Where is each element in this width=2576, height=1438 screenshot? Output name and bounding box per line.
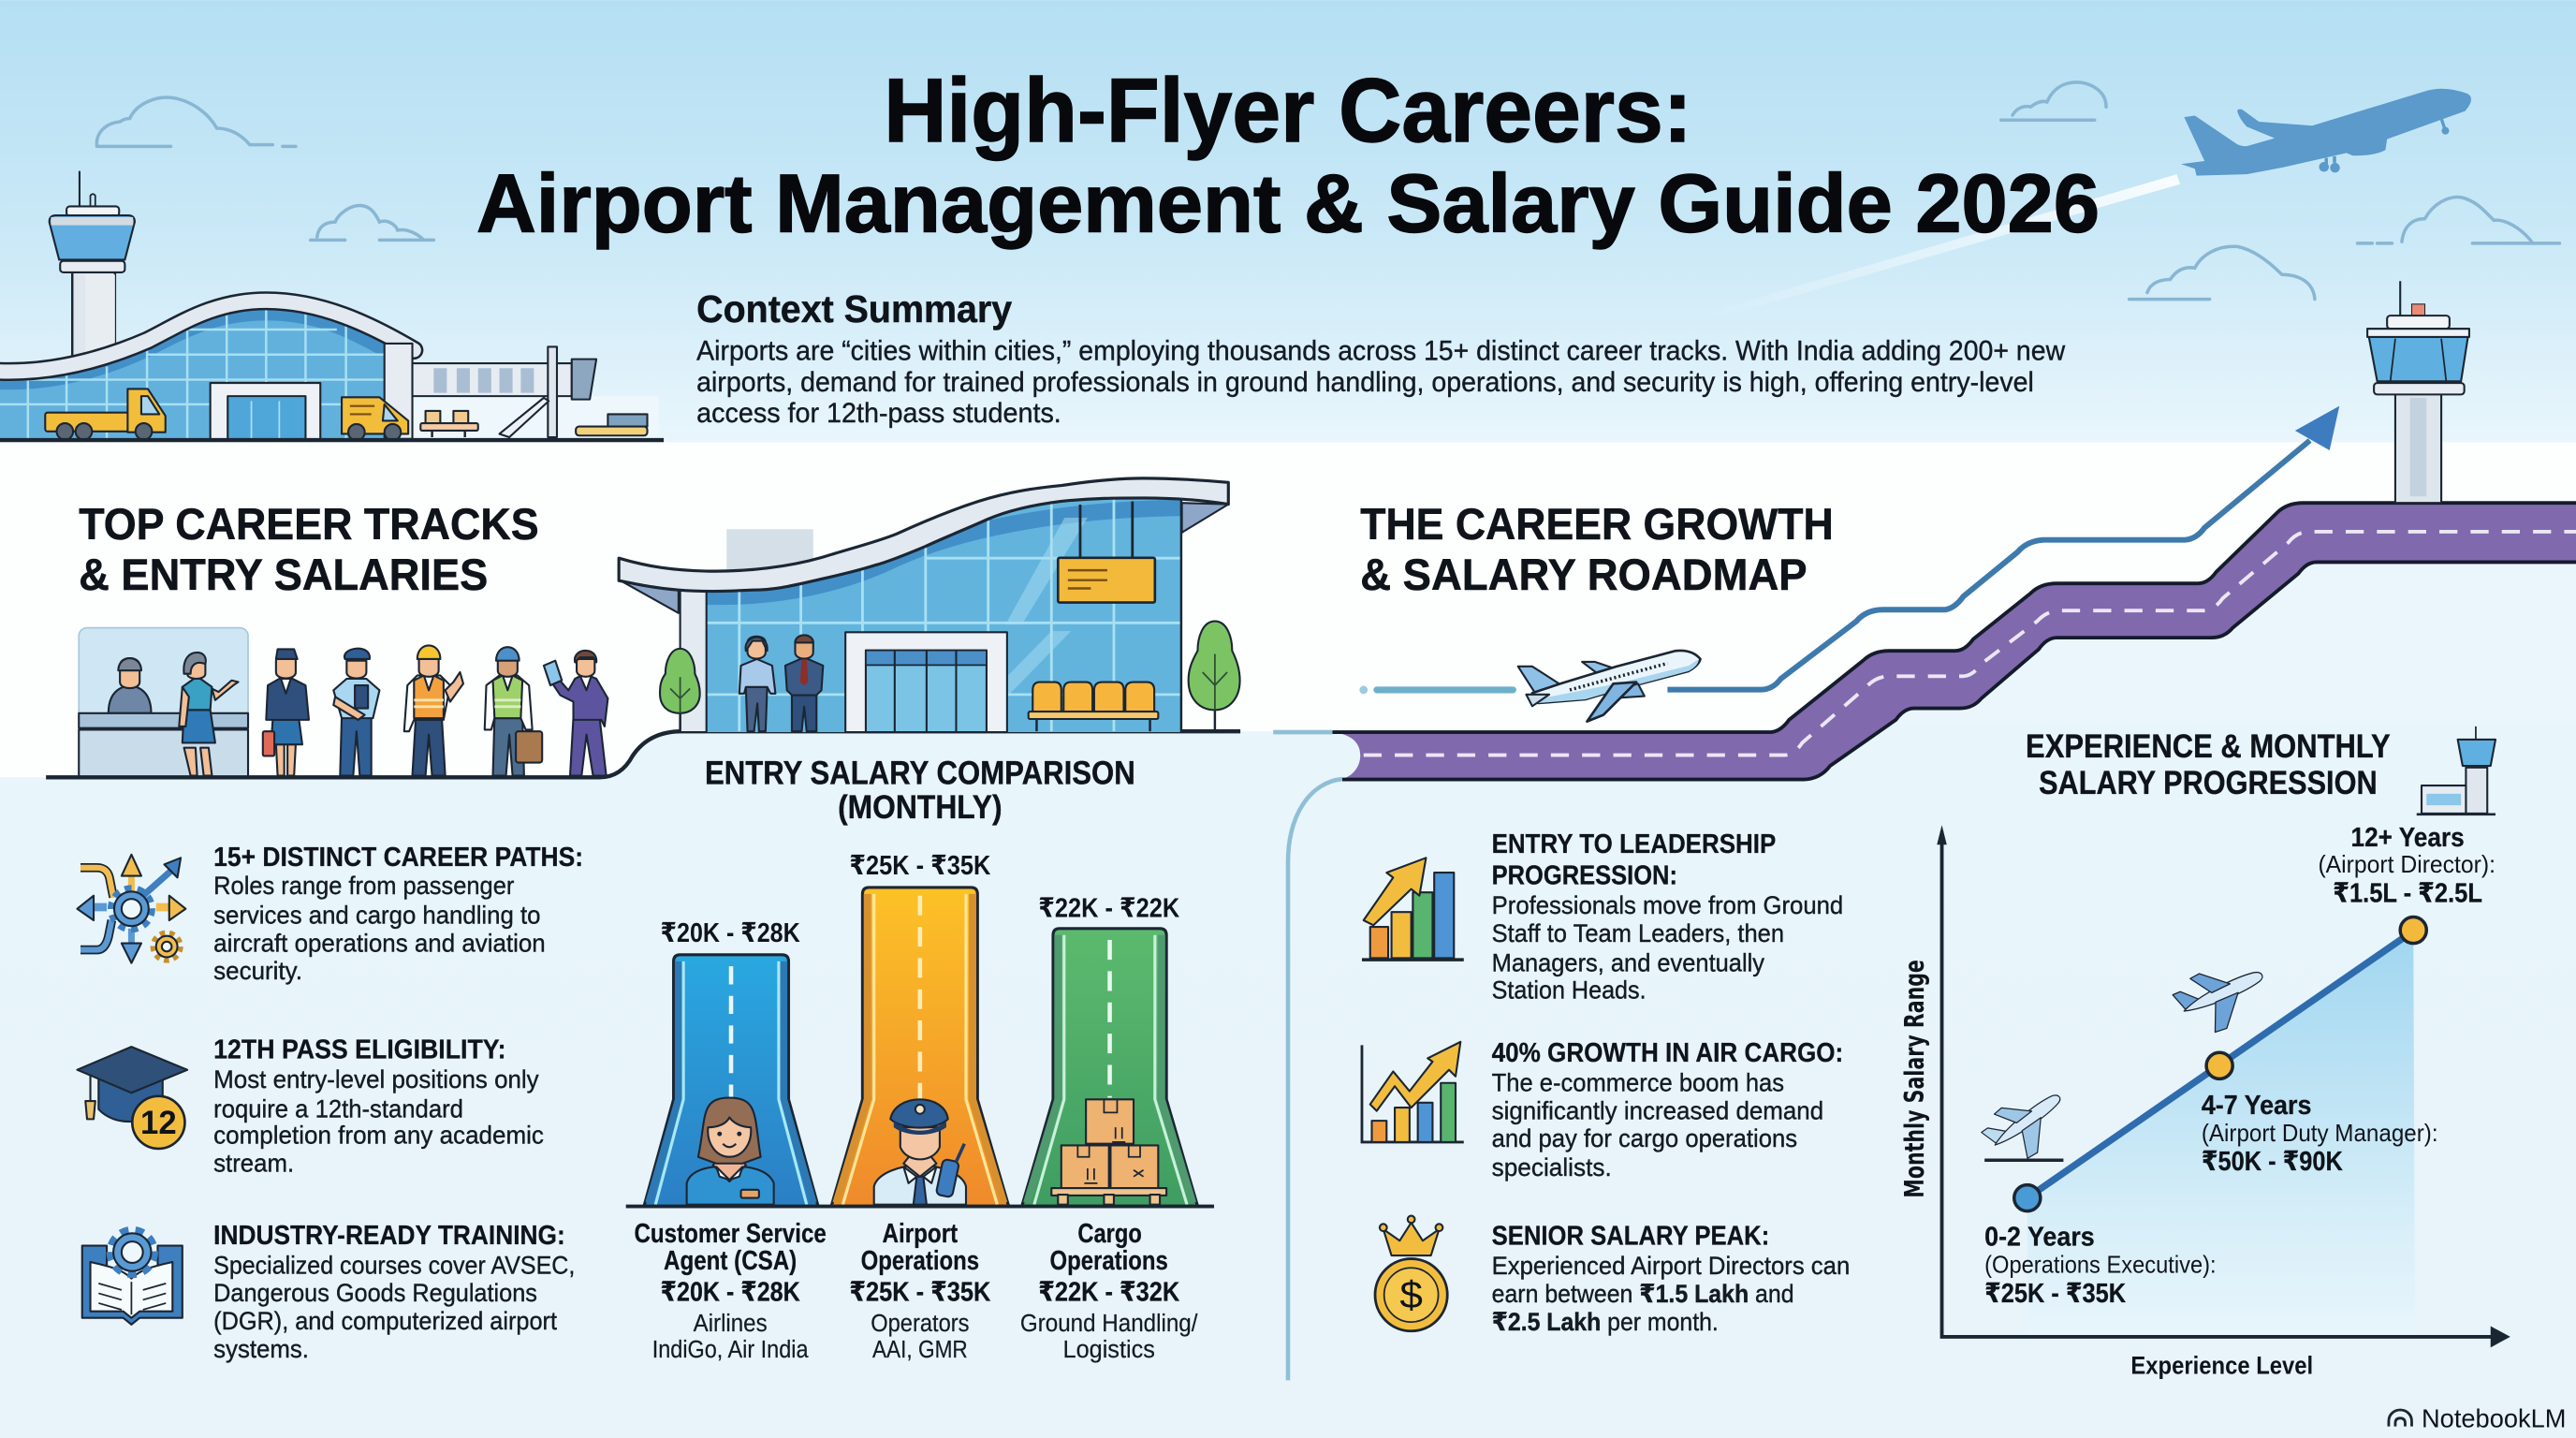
bar labels: customer service agent: IndiGo, Air India — [652, 1335, 809, 1363]
baseline — [626, 1205, 1214, 1208]
chart: experience and salary progression — [1899, 823, 2510, 1379]
staff: cabin crew — [263, 649, 309, 776]
node: mid — [2206, 1052, 2232, 1078]
icon: cruising plane — [2169, 951, 2276, 1043]
icon: growth chart — [1362, 1042, 1464, 1142]
roof — [0, 301, 414, 372]
bar: customer service: ₹20K - ₹28K — [661, 918, 800, 948]
heading: career growth roadmap — [1360, 500, 1834, 600]
agent behind desk — [109, 658, 151, 713]
heading: experience and salary progression: EXPERIENCE & MONTHLY — [2026, 728, 2391, 765]
benches — [1029, 682, 1158, 731]
icon: roadmap airplane — [1518, 651, 1701, 722]
cloud: far right — [2358, 198, 2559, 243]
item: career paths — [77, 843, 583, 985]
item: air cargo growth — [1362, 1038, 1843, 1181]
bar: airport operations: ₹25K - ₹35K — [849, 851, 990, 881]
text: security. — [213, 956, 302, 985]
text: SENIOR SALARY PEAK: — [1492, 1222, 1769, 1252]
text: ₹2.5 Lakh per month. — [1492, 1307, 1719, 1336]
background: white middle band — [0, 442, 2576, 777]
entrance — [845, 632, 1007, 732]
heading: top career tracks: TOP CAREER TRACKS — [79, 500, 539, 550]
text: completion from any academic — [213, 1121, 544, 1150]
text: aircraft operations and aviation — [213, 928, 546, 957]
notebooklm mark: NotebookLM — [2422, 1403, 2566, 1432]
text: INDUSTRY-READY TRAINING: — [213, 1221, 565, 1251]
label: mid — [2202, 1091, 2438, 1177]
item: industry-ready training — [82, 1221, 575, 1363]
glass terminal building — [0, 306, 385, 439]
x axis label: Experience Level — [2130, 1350, 2313, 1379]
text: ENTRY TO LEADERSHIP — [1492, 829, 1776, 859]
label: entry: 0-2 Years — [1984, 1223, 2095, 1253]
background: sky band — [0, 0, 2576, 442]
item: senior salary peak — [1375, 1216, 1850, 1336]
staff: manager in purple suit — [544, 651, 607, 776]
text: Most entry-level positions only — [213, 1064, 539, 1093]
people at terminal — [739, 635, 823, 731]
heading: experience and salary progression — [2026, 728, 2391, 801]
label: senior — [2318, 823, 2496, 909]
yellow truck — [45, 389, 166, 440]
cloud: above tower — [2130, 246, 2315, 300]
bar: customer service — [644, 918, 818, 1206]
text: roquire a 12th-standard — [213, 1094, 463, 1123]
text: 40% GROWTH IN AIR CARGO: — [1492, 1038, 1843, 1068]
text: Dangerous Goods Regulations — [213, 1278, 537, 1307]
cloud: near tower — [311, 206, 433, 240]
baggage cart — [420, 411, 478, 437]
context summary — [696, 287, 2066, 429]
text: services and cargo handling to — [213, 901, 540, 930]
icon: crown and coin: $ — [1399, 1273, 1423, 1316]
icon: airplane silhouette — [2181, 89, 2471, 176]
text: PROGRESSION: — [1492, 860, 1677, 890]
label: entry — [1984, 1223, 2217, 1309]
icon: graduation cap with 12 badge — [77, 1047, 187, 1149]
label: senior: ₹1.5L - ₹2.5L — [2333, 879, 2482, 909]
icon: rising bar chart — [1362, 858, 1464, 960]
icon: branching arrows — [77, 855, 185, 963]
heading: top career tracks — [79, 500, 539, 600]
text: Experienced Airport Directors can — [1492, 1251, 1850, 1280]
wave roof — [619, 478, 1228, 592]
bar labels: airport operations: ₹25K - ₹35K — [849, 1277, 990, 1307]
bar labels: customer service agent — [634, 1219, 827, 1363]
icon: cargo boxes on pallet — [1051, 1099, 1166, 1205]
heading: experience and salary progression: SALARY PROGRESSION — [2039, 765, 2378, 801]
heading: entry salary comparison: ENTRY SALARY COMPARISON — [705, 755, 1135, 791]
pale area under bridge — [413, 396, 659, 439]
node: senior — [2400, 917, 2426, 944]
thin connector line — [1273, 732, 1342, 1380]
background: lower section — [0, 723, 2576, 1438]
person: airport officer — [874, 1099, 966, 1205]
bar: cargo operations — [1022, 893, 1197, 1206]
text: Staff to Team Leaders, then — [1492, 918, 1784, 947]
heading: top career tracks: & ENTRY SALARIES — [79, 550, 488, 600]
ground vehicle — [576, 414, 648, 435]
item: 12th pass eligibility — [77, 1034, 544, 1178]
ground line — [0, 438, 664, 442]
desk — [79, 713, 248, 728]
text: Station Heads. — [1492, 975, 1647, 1004]
text: Managers, and eventually — [1492, 947, 1764, 976]
roof supports — [622, 581, 679, 613]
text: and pay for cargo operations — [1492, 1123, 1797, 1152]
heading: career growth roadmap: THE CAREER GROWTH — [1360, 500, 1834, 550]
heading: entry salary comparison — [705, 755, 1135, 826]
bar labels: airport operations — [849, 1219, 990, 1363]
text: Professionals move from Ground — [1492, 890, 1843, 919]
icon: runway mark — [1984, 1159, 2063, 1161]
text — [213, 843, 583, 985]
icon: crown and coin — [1375, 1216, 1447, 1331]
text: earn between ₹1.5 Lakh and — [1492, 1279, 1794, 1308]
cloud: upper left — [96, 97, 296, 146]
text — [213, 1221, 575, 1363]
bar labels: cargo operations: Ground Handling/ — [1020, 1309, 1198, 1337]
label: entry: ₹25K - ₹35K — [1984, 1279, 2126, 1309]
heading: entry salary comparison: (MONTHLY) — [838, 789, 1003, 826]
contrail — [1692, 174, 2180, 320]
label: mid: ₹50K - ₹90K — [2202, 1147, 2343, 1177]
control tower, right — [2367, 281, 2469, 503]
title: Airport Management & Salary Guide 2026 — [476, 158, 2100, 250]
icon: graduation cap with 12 badge: 12 — [140, 1105, 177, 1141]
bar labels: cargo operations: ₹22K - ₹32K — [1038, 1277, 1179, 1307]
text — [1492, 1038, 1843, 1181]
illustration: check-in desk and staff line-up — [46, 628, 1240, 777]
staff: ground officer — [333, 649, 379, 776]
progression line — [2027, 931, 2413, 1198]
context summary: airports, demand for trained professionals in ground handling, operations, and security is high, offering entry-level — [696, 367, 2034, 398]
context summary: Context Summary — [696, 287, 1013, 330]
person: customer agent — [687, 1098, 774, 1205]
item: entry to leadership — [1362, 829, 1843, 1004]
text — [213, 1034, 544, 1178]
label: mid: 4-7 Years — [2202, 1091, 2311, 1121]
staff: marshal in green vest with case — [485, 647, 542, 776]
illustration: airport terminal and control tower, top left — [0, 171, 664, 442]
growth arrow — [1359, 406, 2339, 694]
text: significantly increased demand — [1492, 1095, 1823, 1124]
bar: cargo operations: ₹22K - ₹22K — [1038, 893, 1179, 923]
bar labels: cargo operations — [1020, 1219, 1198, 1363]
text: stream. — [213, 1149, 294, 1178]
text: 15+ DISTINCT CAREER PATHS: — [213, 843, 583, 873]
label: mid: (Airport Duty Manager): — [2202, 1121, 2438, 1147]
bar labels: customer service agent: Agent (CSA) — [664, 1246, 797, 1276]
staff: greeter — [179, 653, 238, 776]
icon: small control tower — [2417, 726, 2496, 814]
text: (DGR), and computerized airport — [213, 1306, 557, 1335]
bar labels: cargo operations: Cargo — [1077, 1219, 1142, 1249]
control tower — [50, 171, 135, 365]
text: 12TH PASS ELIGIBILITY: — [213, 1034, 506, 1064]
text: systems. — [213, 1334, 309, 1363]
bar labels: cargo operations: Operations — [1050, 1246, 1168, 1276]
yellow van — [342, 397, 408, 441]
title — [476, 61, 2100, 250]
label: senior: (Airport Director): — [2318, 852, 2496, 878]
y axis label: Monthly Salary Range — [1899, 960, 1930, 1198]
heading: career growth roadmap: & SALARY ROADMAP — [1360, 550, 1808, 600]
bar labels: cargo operations: Logistics — [1063, 1335, 1155, 1363]
node: entry — [2014, 1185, 2041, 1211]
cloud: top right — [2001, 82, 2106, 120]
bar labels: airport operations: Operators — [871, 1309, 970, 1337]
icon: takeoff plane — [1977, 1078, 2078, 1172]
bar labels: customer service agent: ₹20K - ₹28K — [661, 1277, 800, 1307]
text: Roles range from passenger — [213, 871, 514, 900]
bar labels: airport operations: AAI, GMR — [872, 1335, 968, 1363]
glass screen — [79, 628, 248, 726]
tree left — [660, 649, 700, 731]
label: senior: 12+ Years — [2351, 823, 2465, 853]
career runway road — [1332, 503, 2576, 780]
doorway — [211, 383, 320, 441]
context summary: Airports are “cities within cities,” employing thousands across 15+ distinct career tracks. With India adding 200+ new — [696, 336, 2066, 367]
chart: entry salary bars — [626, 851, 1214, 1208]
text: The e-commerce boom has — [1492, 1068, 1784, 1097]
text — [1492, 829, 1843, 1004]
axes — [1937, 825, 2510, 1347]
text: specialists. — [1492, 1152, 1612, 1181]
sign board — [1058, 501, 1155, 603]
ground line with rise — [46, 731, 1240, 777]
bar labels: airport operations: Airport — [882, 1219, 959, 1249]
illustration: terminal building, centre — [619, 478, 1240, 732]
bar labels: airport operations: Operations — [861, 1246, 979, 1276]
context summary: access for 12th-pass students. — [696, 398, 1061, 429]
label: entry: (Operations Executive): — [1984, 1252, 2217, 1278]
bar labels: customer service agent: Airlines — [694, 1309, 768, 1337]
bar labels: customer service agent: Customer Service — [634, 1219, 827, 1249]
text — [1492, 1222, 1850, 1336]
bar: airport operations — [831, 851, 1009, 1206]
text: Specialized courses cover AVSEC, — [213, 1250, 575, 1279]
area under line — [2027, 931, 2415, 1336]
staff: engineer in orange vest — [404, 645, 463, 776]
icon: book with gear — [82, 1231, 183, 1325]
title: High-Flyer Careers: — [884, 61, 1692, 161]
jet bridge — [413, 346, 596, 437]
glass facade — [707, 490, 1181, 732]
tree right — [1189, 622, 1240, 731]
